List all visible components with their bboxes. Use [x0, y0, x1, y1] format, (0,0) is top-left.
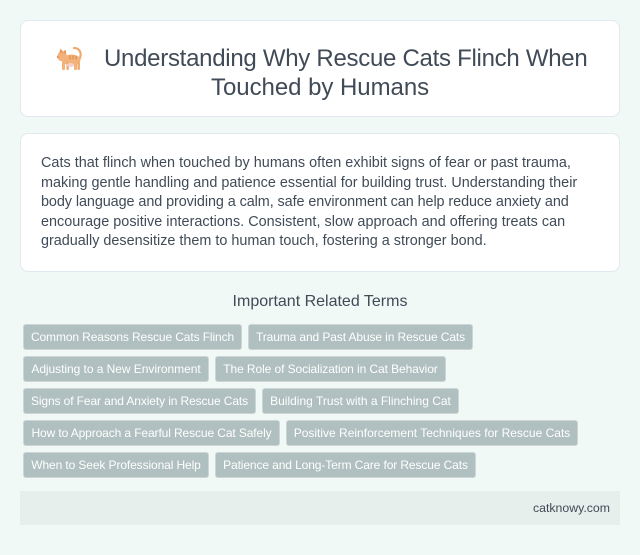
tag: [215, 452, 476, 478]
tag: Common Reasons Rescue Cats Flinch: [31, 330, 234, 344]
tag: Positive Reinforcement Techniques for Rescue Cats: [294, 426, 570, 440]
text block: description: body language and providing a calm, safe environment can help reduce anxiety and: [41, 194, 569, 210]
tag: Patience and Long-Term Care for Rescue Cats: [223, 458, 468, 472]
tag: [248, 324, 473, 350]
title: Understanding Why Rescue Cats Flinch When: [104, 45, 587, 72]
title: Touched by Humans: [211, 74, 429, 101]
text block: description: Cats that flinch when touched by humans often exhibit signs of fear or past trauma,: [41, 155, 571, 171]
tag: [23, 388, 256, 414]
tag: [23, 452, 209, 478]
tags: related terms: [23, 324, 578, 478]
tag: When to Seek Professional Help: [31, 458, 201, 472]
tag: [23, 356, 209, 382]
footer: [20, 491, 620, 525]
tag: [286, 420, 578, 446]
tag: Signs of Fear and Anxiety in Rescue Cats: [31, 394, 248, 408]
text block: description: encourage positive interactions. Consistent, slow approach and offering treats can: [41, 214, 565, 230]
title: [104, 45, 587, 101]
heading: related terms: Important Related Terms: [233, 293, 407, 310]
text block: description: gradually desensitize them to human touch, fostering a stronger bond.: [41, 233, 487, 249]
tag: Building Trust with a Flinching Cat: [270, 394, 451, 408]
tag: Trauma and Past Abuse in Rescue Cats: [256, 330, 465, 344]
tag: The Role of Socialization in Cat Behavior: [223, 362, 438, 376]
icon: cat: [56, 46, 82, 70]
panel: description: [20, 133, 620, 272]
text block: description: [41, 155, 577, 249]
tag: Adjusting to a New Environment: [31, 362, 201, 376]
tag: [23, 420, 280, 446]
tag: [215, 356, 446, 382]
tag: [23, 324, 242, 350]
panel: title card: [20, 20, 620, 117]
text block: description: making gentle handling and patience essential for building trust. Understanding their: [41, 174, 577, 190]
tag: [262, 388, 459, 414]
tag: How to Approach a Fearful Rescue Cat Safely: [31, 426, 272, 440]
footer: source: catknowy.com: [533, 501, 610, 515]
